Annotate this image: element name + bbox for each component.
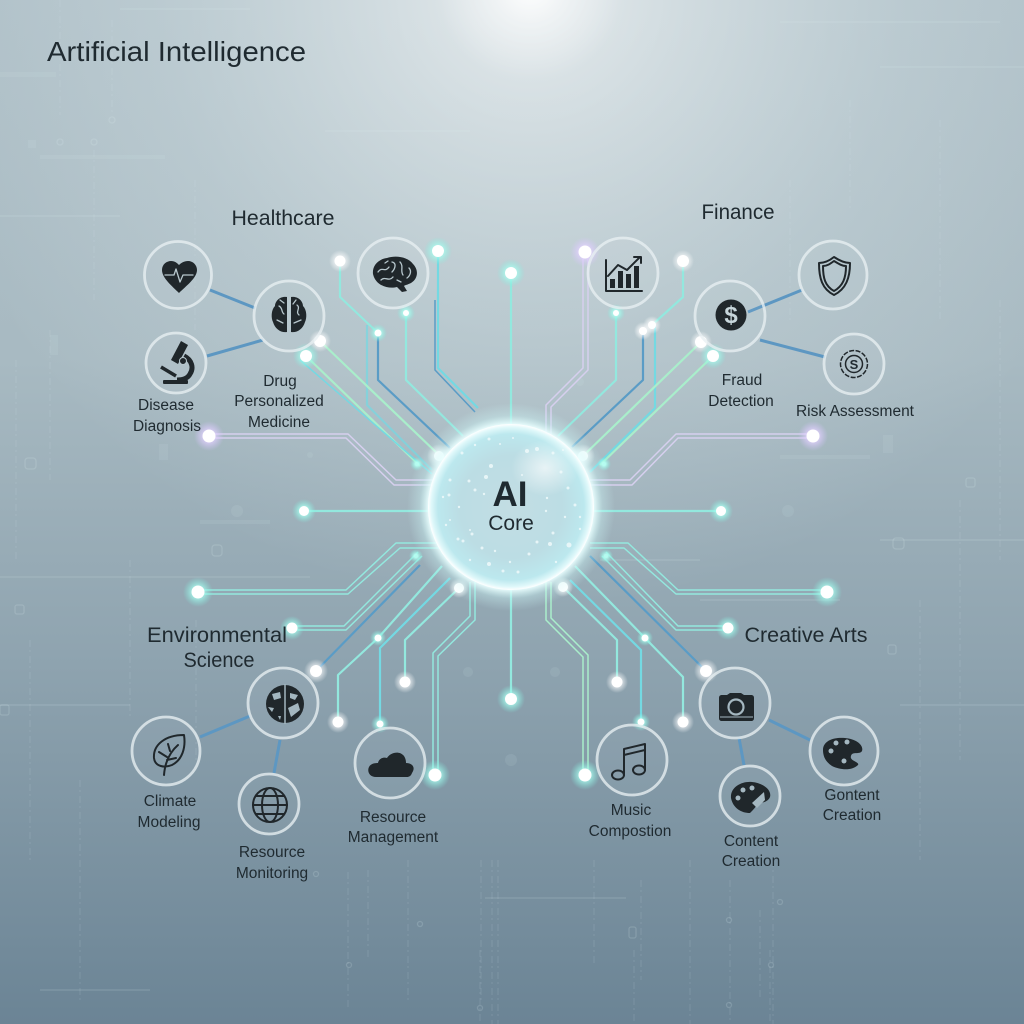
AI core sphere [407,403,615,611]
label: Content Creation: Creation [722,853,780,870]
node: earth split icon [248,668,318,738]
label: Resource Management: Resource [360,809,426,826]
label: Content Creation: Content [724,833,779,850]
node: leaf icon [132,717,200,785]
label: Resource Monitoring: Resource [239,844,305,861]
label: Music Compostion [589,802,671,840]
panel: finance [588,201,915,420]
label: Fraud Detection [708,372,774,410]
circuit traces: bottom left [198,543,475,775]
panel: healthcare [133,207,428,435]
label: Resource Management [348,809,439,846]
heading: creative arts: Creative Arts [744,624,868,647]
heading: finance: Finance [702,201,774,224]
label: Fraud Detection: Fraud [722,372,762,389]
connector links: environmental science [200,716,280,773]
connector links: finance [748,290,825,357]
label: Climate Modeling: Modeling [138,814,200,831]
node: risk coin icon: S [850,357,859,372]
label: Fraud Detection: Detection [708,393,774,410]
label: Climate Modeling: Climate [144,793,196,810]
label: Music Compostion: Compostion [589,823,671,840]
label: Gontent Creation [823,787,881,824]
label: Disease Diagnosis: Disease [138,397,194,414]
label: Resource Monitoring [236,844,308,882]
connector links: creative arts [739,720,810,765]
node: brain top icon [358,238,428,308]
label: Drug Personalized Medicine: Drug [263,373,297,390]
circuit traces: top right [511,252,813,485]
sphere label: Core: Core [488,512,534,535]
label: Resource Management: Management [348,829,439,846]
node: dollar icon [695,281,765,351]
circuit traces: top left [209,251,478,485]
label: Gontent Creation: Gontent [824,787,880,804]
circuit traces: bottom right [546,543,827,775]
node: shield icon [799,241,867,309]
node: growth chart icon [588,238,658,308]
node: cloud icon [355,728,425,798]
label: Drug Personalized Medicine: Personalized [234,393,324,410]
node: brain centre icon [254,281,324,351]
heading: environmental science [147,624,287,672]
node: palette icon [810,717,878,785]
heading: environmental science: Science [184,649,254,672]
node: heart rate icon [144,242,212,308]
label: Disease Diagnosis [133,397,201,435]
label: Gontent Creation: Creation [823,807,881,824]
node: microscope icon [146,333,206,393]
title: Artificial Intelligence [47,36,306,67]
node: palette with brush icon [720,766,780,826]
node: camera icon [700,668,770,738]
label: Climate Modeling [138,793,200,831]
heading: healthcare: Healthcare [232,207,334,230]
panel: environmental science [132,624,439,882]
circuit traces: centre horizontals [304,511,721,699]
label: Disease Diagnosis: Diagnosis [133,418,201,435]
node: music icon [597,725,667,795]
panel: creative arts [589,624,881,870]
label: Content Creation [722,833,780,870]
heading: environmental science: Environmental [147,624,287,647]
label: Drug Personalized Medicine: Medicine [248,414,310,431]
node: globe icon [239,774,299,834]
label: Risk Assessment: Risk Assessment [796,403,915,420]
label: Resource Monitoring: Monitoring [236,865,308,882]
glowing trace end nodes [183,237,842,790]
node: risk coin icon [824,334,884,394]
label: Drug Personalized Medicine [234,373,324,431]
connector links: healthcare [207,290,263,356]
node: dollar icon: $ [724,302,738,329]
sphere label: AI: AI [492,475,528,514]
label: Music Compostion: Music [611,802,651,819]
